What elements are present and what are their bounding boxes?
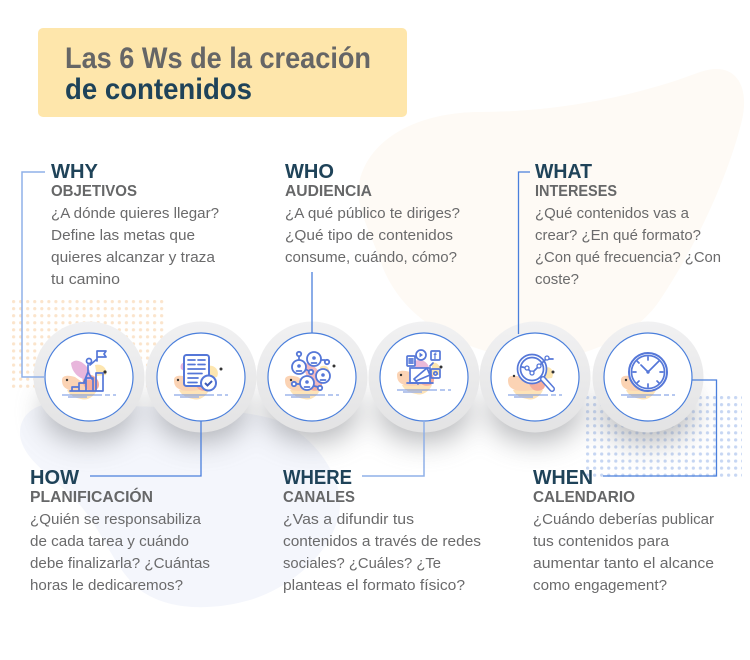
body: who: ¿Qué tipo de contenidos xyxy=(285,227,453,244)
body: why: quieres alcanzar y traza xyxy=(51,249,216,266)
body: what: crear? ¿En qué formato? xyxy=(535,227,701,244)
text block: how xyxy=(30,467,210,594)
title line 1: Las 6 Ws de la creación xyxy=(65,42,371,75)
body: where: planteas el formato físico? xyxy=(283,577,465,594)
dot pattern: blue xyxy=(586,396,742,480)
body: why xyxy=(51,205,219,288)
body: when: como engagement? xyxy=(533,577,667,594)
subheading: calendario: CALENDARIO xyxy=(533,489,635,506)
icon: magnifying glass with chart xyxy=(508,354,562,400)
heading: why: WHY xyxy=(51,161,99,183)
heading: when: WHEN xyxy=(533,467,593,489)
body: who: ¿A qué público te diriges? xyxy=(285,205,460,222)
body: when: ¿Cuándo deberías publicar xyxy=(533,511,714,528)
body: what: ¿Qué contenidos vas a xyxy=(535,205,690,222)
background blob: pale blue xyxy=(20,403,340,607)
body: how xyxy=(30,511,210,594)
circle shadows xyxy=(43,382,694,442)
connector: why xyxy=(22,172,45,377)
icon circle: when xyxy=(592,322,704,432)
body: where: ¿Vas a difundir tus xyxy=(283,511,414,528)
body: why: tu camino xyxy=(51,271,120,288)
body: how: ¿Quién se responsabiliza xyxy=(30,511,202,528)
text block: what xyxy=(535,161,721,288)
icon: laptop, megaphone and social: f xyxy=(434,351,438,361)
dot pattern: orange xyxy=(12,300,164,390)
body: where: sociales? ¿Cuáles? ¿Te xyxy=(283,555,441,572)
connector: how xyxy=(90,421,201,476)
text block: why xyxy=(51,161,219,288)
icon: person climbing with flag xyxy=(62,351,116,400)
body: when: tus contenidos para xyxy=(533,533,670,550)
body: who: consume, cuándo, cómo? xyxy=(285,249,457,266)
body: what: ¿Con qué frecuencia? ¿Con xyxy=(535,249,721,266)
connector: who xyxy=(311,272,313,333)
icon circle: why xyxy=(34,322,144,432)
heading: where: WHERE xyxy=(283,467,352,489)
body: where xyxy=(283,511,481,594)
body: when: aumentar tanto el alcance xyxy=(533,555,714,572)
body: where: contenidos a través de redes xyxy=(283,533,481,550)
text block: who xyxy=(285,161,460,266)
body: what xyxy=(535,205,721,288)
icon circle: how xyxy=(146,322,256,432)
heading: what: WHAT xyxy=(535,161,592,183)
connector: where xyxy=(362,421,424,476)
icon circle: where xyxy=(368,322,480,432)
background blob: peach xyxy=(358,69,744,359)
icon circle: who xyxy=(256,322,368,432)
text block: where xyxy=(283,467,481,594)
text block: when xyxy=(533,467,714,594)
body: when xyxy=(533,511,714,594)
body: what: coste? xyxy=(535,271,579,288)
connector: what xyxy=(518,172,530,334)
connector: when xyxy=(603,380,716,476)
body: how: de cada tarea y cuándo xyxy=(30,533,189,550)
subheading: audiencia: AUDIENCIA xyxy=(285,183,372,200)
icon: connected people xyxy=(285,352,339,400)
heading: how: HOW xyxy=(30,467,79,489)
body: why: ¿A dónde quieres llegar? xyxy=(51,205,219,222)
body: who xyxy=(285,205,460,266)
icon: document with check xyxy=(174,355,228,400)
body: how: horas le dedicaremos? xyxy=(30,577,183,594)
subheading: canales: CANALES xyxy=(283,489,355,506)
icon: clock xyxy=(621,353,675,400)
icon circle: what xyxy=(480,322,590,432)
subheading: objetivos: OBJETIVOS xyxy=(51,183,137,200)
title banner xyxy=(38,28,407,117)
title line 2: de contenidos xyxy=(65,73,252,106)
subheading: intereses: INTERESES xyxy=(535,183,617,200)
body: how: debe finalizarla? ¿Cuántas xyxy=(30,555,210,572)
heading: who: WHO xyxy=(285,161,334,183)
body: why: Define las metas que xyxy=(51,227,195,244)
subheading: planificación: PLANIFICACIÓN xyxy=(30,488,153,506)
